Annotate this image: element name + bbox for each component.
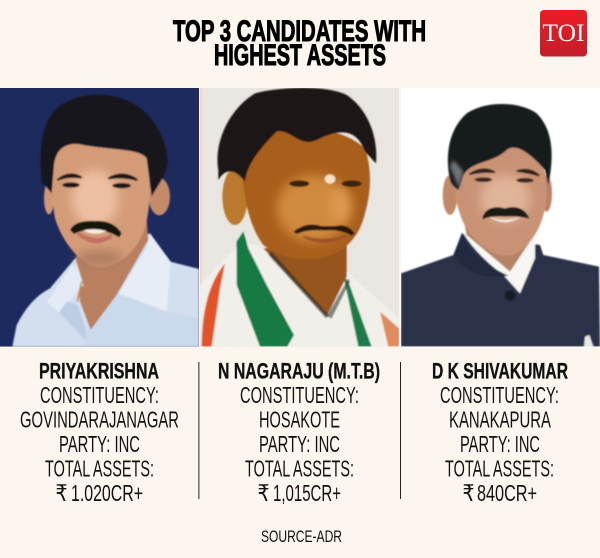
text block: Priyakrishna: PARTY: INC (59, 431, 140, 457)
text block: D K Shivakumar: ₹ (462, 481, 474, 507)
panel: D K Shivakumar portrait (401, 88, 600, 347)
title: HIGHEST ASSETS (214, 39, 386, 72)
panel: Priyakrishna portrait (0, 88, 199, 347)
title (173, 15, 426, 72)
text block: D K Shivakumar: PARTY: INC (460, 431, 540, 457)
text block: Priyakrishna: PRIYAKRISHNA (39, 358, 159, 384)
text block: N Nagaraju: N NAGARAJU (M.T.B) (218, 358, 380, 384)
text block: D K Shivakumar: 840CR+ (477, 480, 537, 506)
text block: N Nagaraju: PARTY: INC (259, 431, 340, 457)
text block: Priyakrishna: 1.020CR+ (71, 480, 143, 506)
text block: Priyakrishna: ₹ (56, 481, 68, 507)
text block: N Nagaraju: HOSAKOTE (259, 406, 340, 432)
text block: Priyakrishna (20, 358, 179, 507)
text block: N Nagaraju (218, 358, 380, 507)
divider (400, 362, 401, 499)
text block: Priyakrishna: CONSTITUENCY: (40, 382, 159, 408)
text block: N Nagaraju: ₹ (258, 481, 270, 507)
icon: TOI logo (540, 10, 587, 56)
text block: N Nagaraju: 1,015CR+ (273, 480, 341, 506)
title: TOP 3 CANDIDATES WITH (173, 15, 426, 48)
text block: Priyakrishna: GOVINDARAJANAGAR (20, 406, 179, 432)
text block: Priyakrishna: TOTAL ASSETS: (45, 456, 154, 482)
text block: N Nagaraju: CONSTITUENCY: (240, 382, 359, 408)
divider (198, 362, 200, 499)
panel: N Nagaraju portrait (200, 88, 399, 347)
text block: N Nagaraju: TOTAL ASSETS: (245, 456, 354, 482)
text block: D K Shivakumar (432, 358, 568, 507)
source note: SOURCE-ADR (261, 527, 342, 546)
icon: TOI logo: TOI (542, 20, 584, 47)
